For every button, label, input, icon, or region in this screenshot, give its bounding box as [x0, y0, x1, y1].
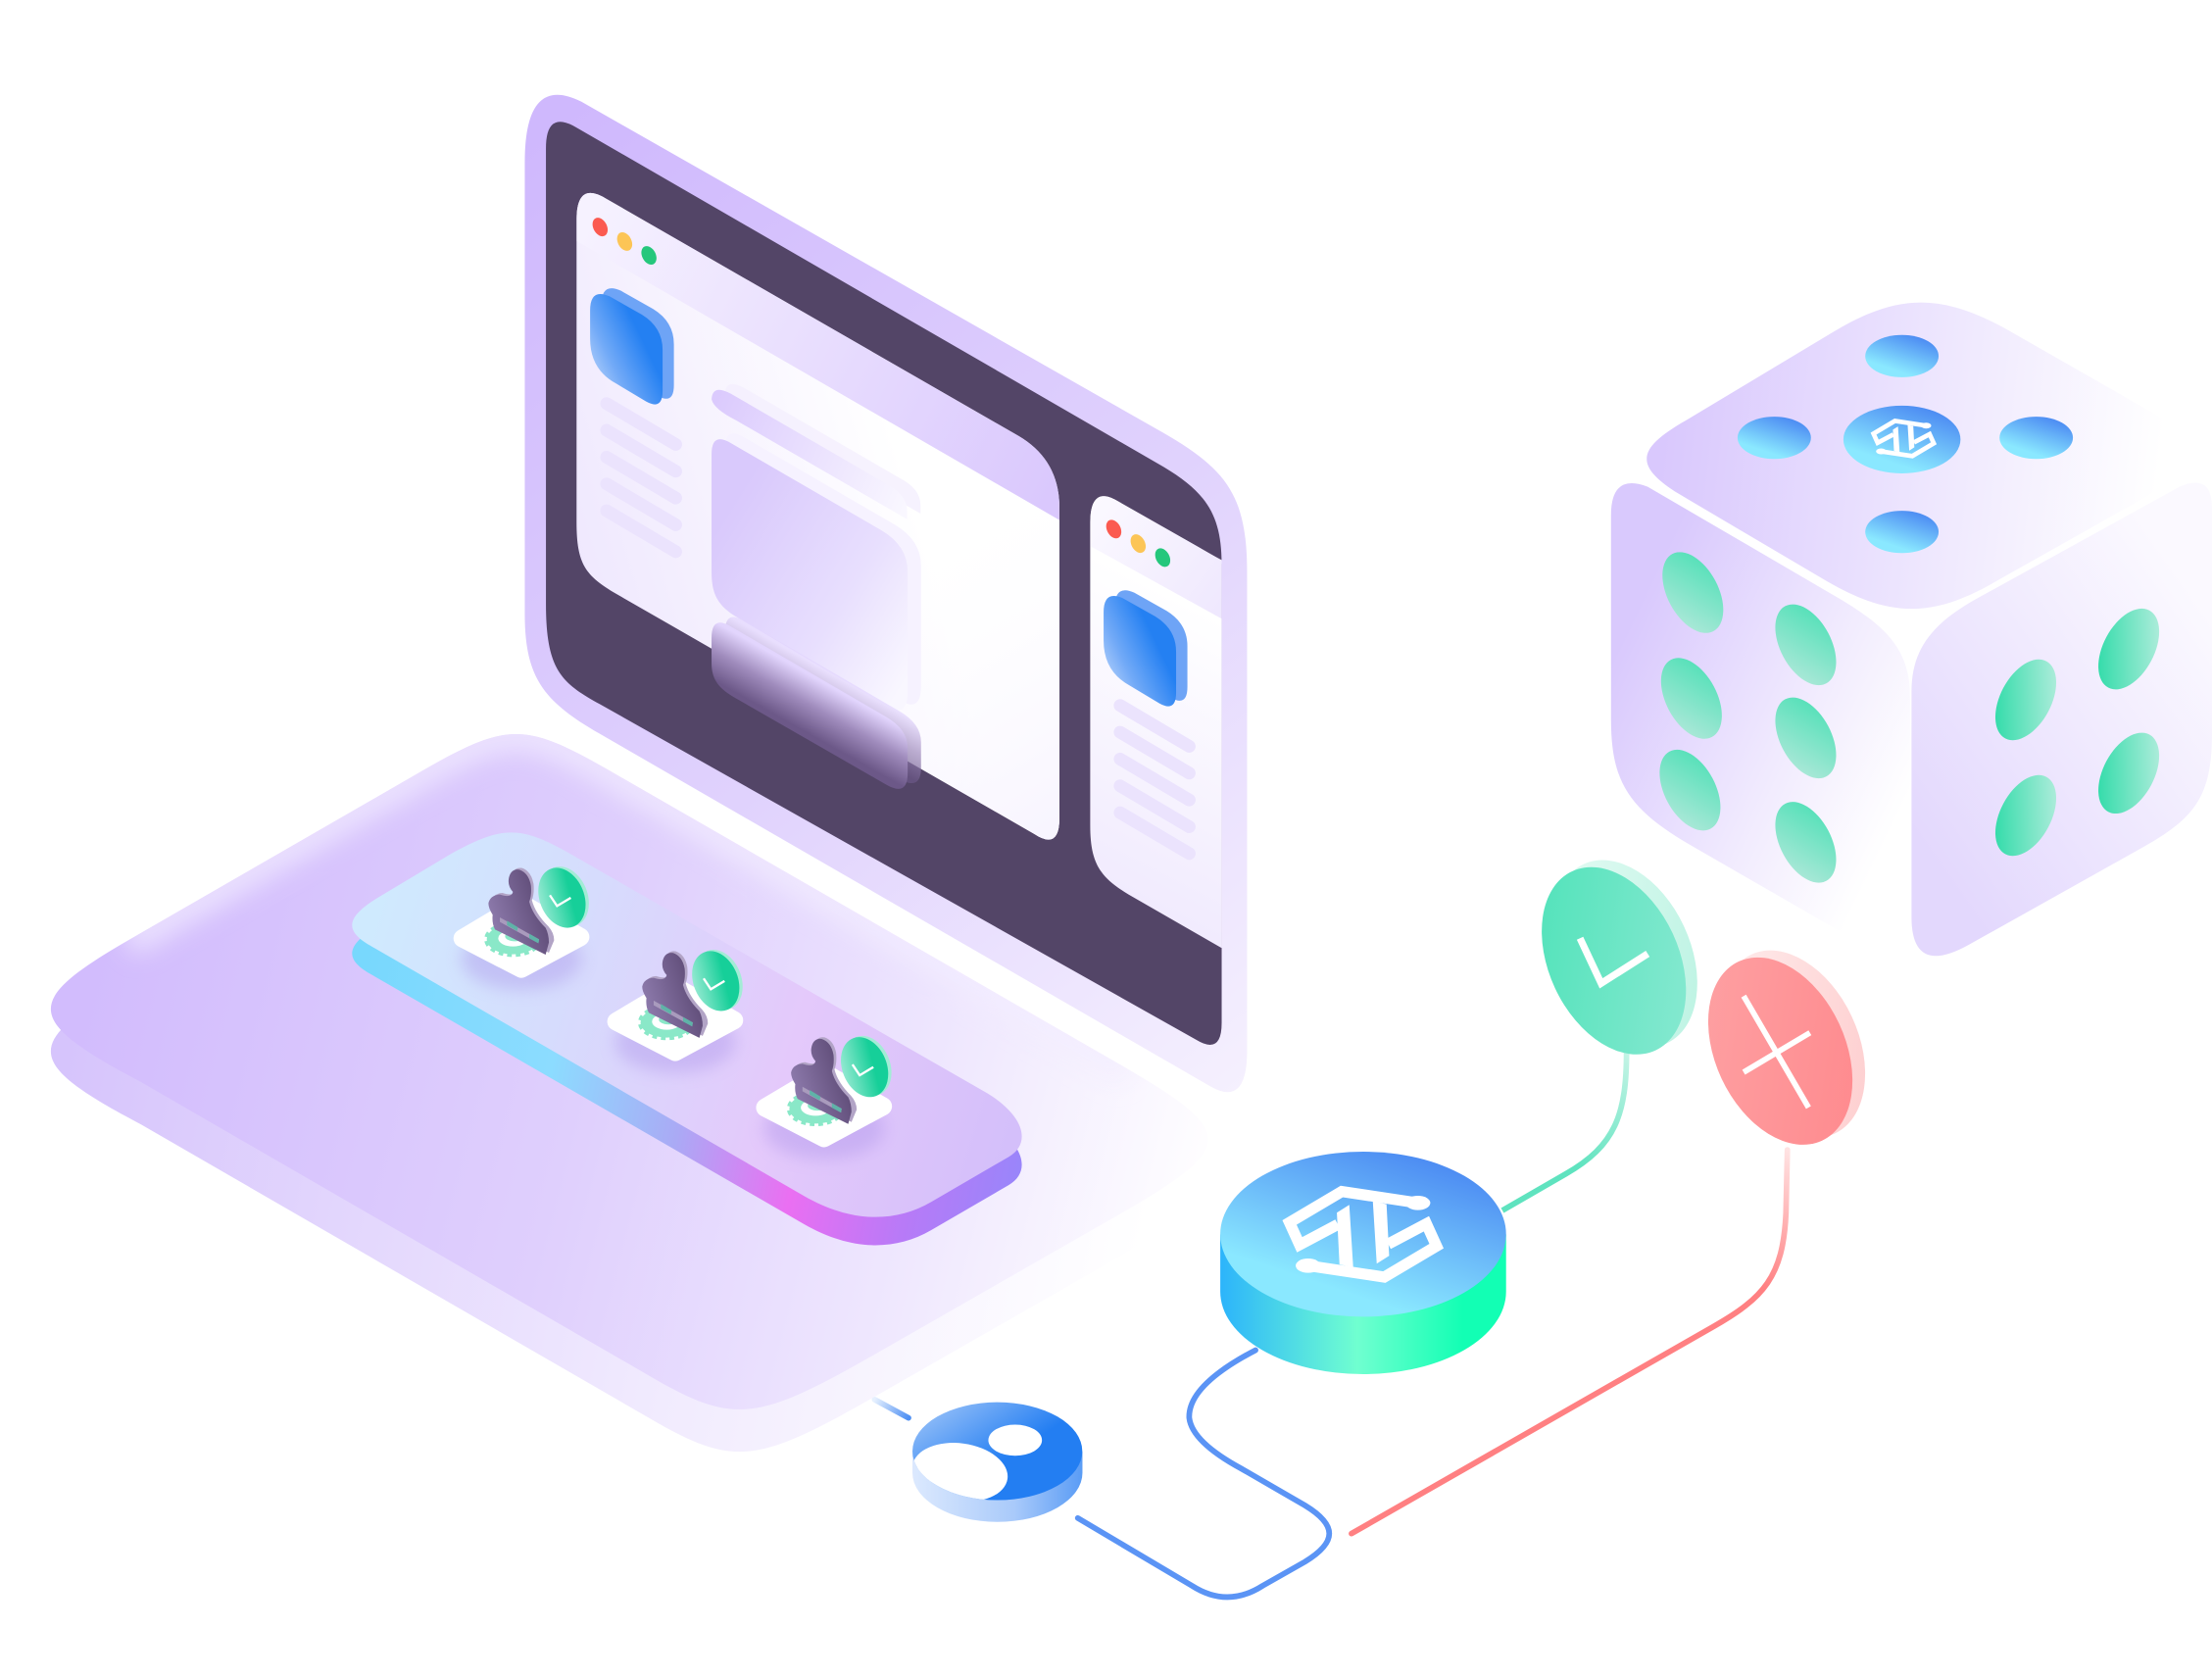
- main window: [576, 192, 1059, 840]
- icon: person disc: [903, 1403, 1082, 1522]
- deck lower layer: [51, 776, 1207, 1452]
- window control dots: [592, 218, 657, 265]
- middle card bottom, translucent over dark panel: [712, 617, 921, 789]
- stamp tile 3 with check badge: [763, 1029, 900, 1160]
- plate gradient edge: [352, 861, 1022, 1245]
- die logo pip mark: [1874, 420, 1934, 456]
- main window header bar: [576, 192, 1059, 519]
- connector: green line from check coin to central disc: [1502, 1051, 1627, 1210]
- disc top: [1220, 1152, 1506, 1316]
- dice: [1611, 303, 2212, 956]
- screen dark panel: [546, 122, 1222, 1045]
- disc side: [1220, 1235, 1506, 1374]
- side window control dots: [1106, 519, 1170, 567]
- disc logo mark: [1290, 1192, 1437, 1277]
- left face green pips: [1647, 542, 1848, 893]
- laptop trackpad plate: [352, 832, 1022, 1245]
- die right face: [1911, 483, 2212, 956]
- person disc top: [912, 1403, 1082, 1501]
- top face blue pips: [1738, 335, 2073, 553]
- right face green pips: [1983, 599, 2172, 866]
- side window: [1090, 496, 1221, 949]
- die top face: [1647, 303, 2185, 609]
- blue card: [590, 288, 674, 405]
- connector: blue line from person disc to central disc: [874, 1351, 1329, 1597]
- middle card top: [712, 384, 920, 519]
- person head: [988, 1425, 1042, 1456]
- icon: red cross coin: [1680, 927, 1893, 1168]
- middle card large: [712, 433, 921, 711]
- laptop base deck: [51, 734, 1207, 1452]
- side window header bar: [1090, 496, 1221, 618]
- side list lines: [1120, 706, 1189, 854]
- plate top surface: [352, 832, 1022, 1217]
- deck upper layer: [51, 734, 1207, 1409]
- person shoulders: [913, 1443, 1008, 1500]
- side blue card: [1104, 590, 1188, 707]
- person disc side: [912, 1452, 1082, 1522]
- icon: green check coin: [1513, 837, 1726, 1078]
- die left face: [1611, 483, 1910, 952]
- central logo disc: [1220, 1152, 1506, 1374]
- stamp tile 1 with check badge: [461, 860, 598, 990]
- laptop screen: [524, 95, 1247, 1092]
- connector: red line from cross coin: [1352, 1150, 1788, 1534]
- screen bezel: [524, 95, 1247, 1092]
- stamp tile 2 with check badge: [614, 943, 751, 1073]
- list lines: [607, 404, 675, 552]
